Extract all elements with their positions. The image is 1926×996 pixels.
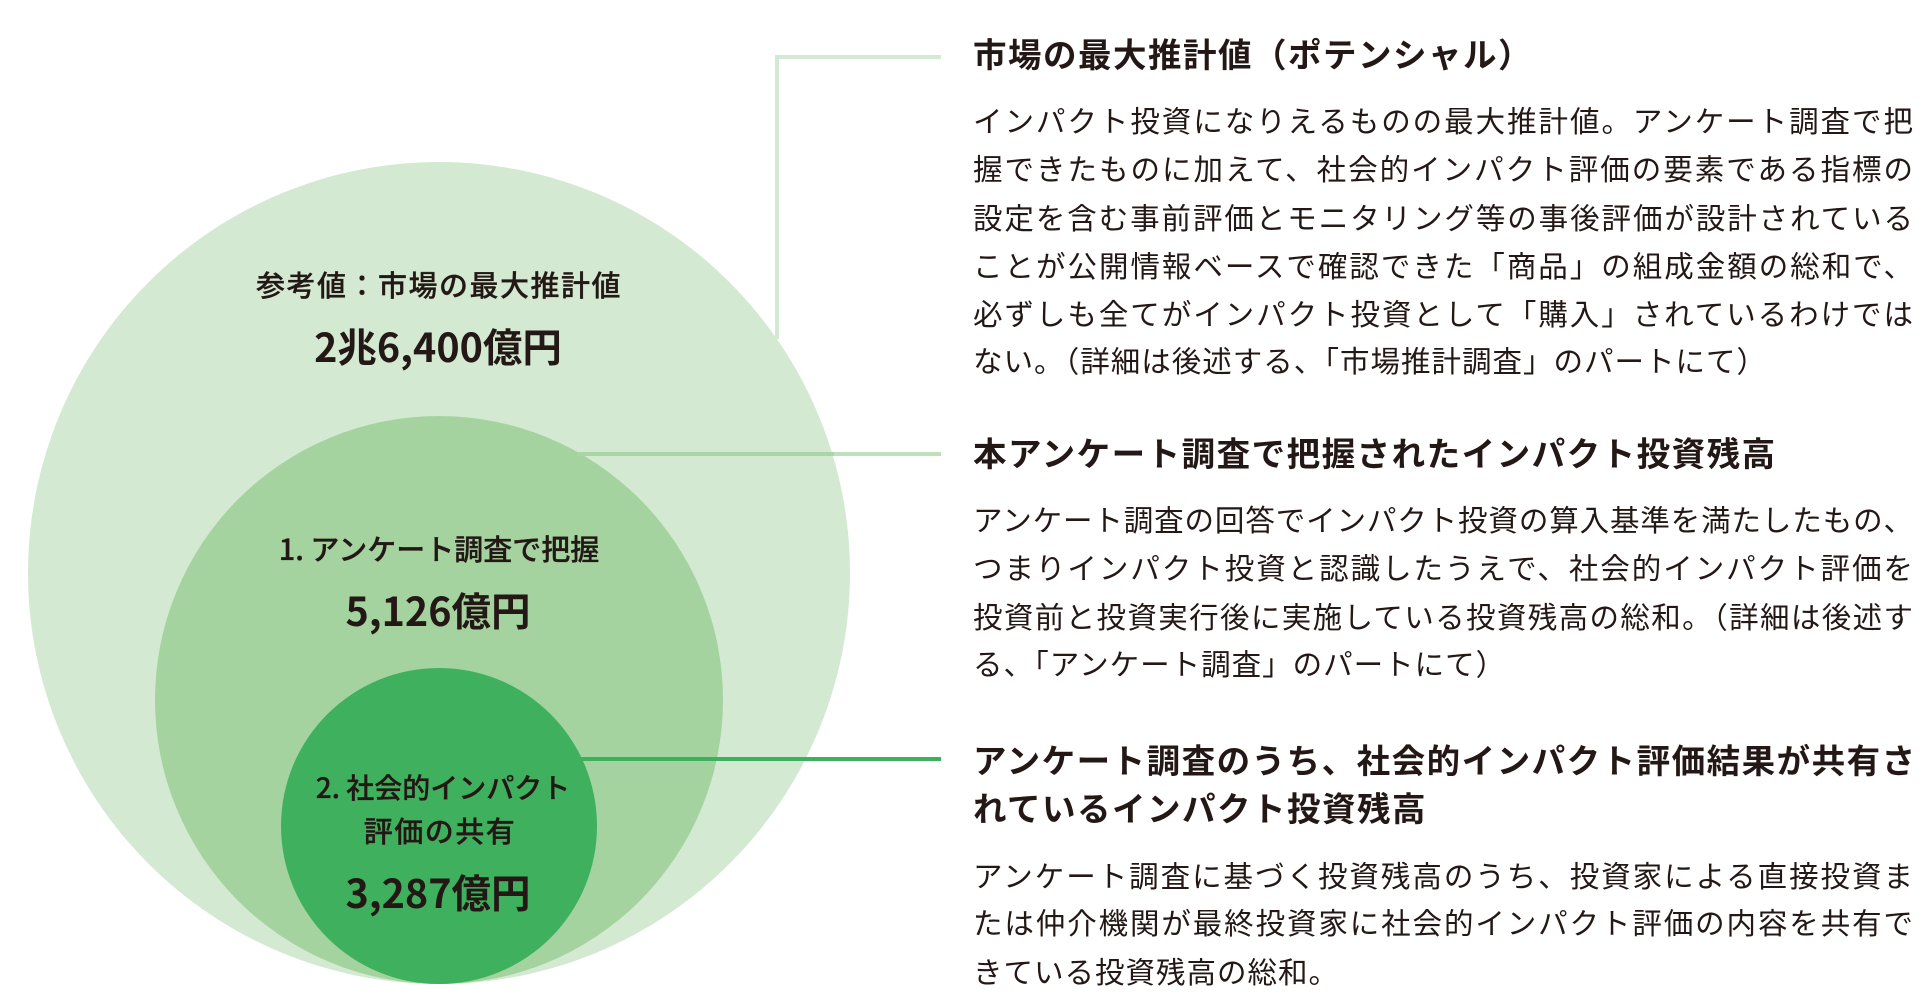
body: market potential: 設定を含む事前評価とモニタリング等の事後評価が設計されている xyxy=(973,196,1913,238)
connector: market maximum to heading xyxy=(775,55,941,339)
body: survey total: つまりインパクト投資と認識したうえで、社会的インパクト評価を xyxy=(973,546,1913,588)
body: impact evaluation shared: きている投資残高の総和。 xyxy=(973,950,1339,992)
value: 5,126億円: 5,126億円 xyxy=(345,581,531,638)
body: survey total: る、「アンケート調査」のパートにて） xyxy=(973,642,1506,684)
heading: impact evaluation shared xyxy=(973,734,1917,831)
heading: impact evaluation shared: アンケート調査のうち、社会的インパクト評価結果が共有さ xyxy=(973,734,1917,783)
body: impact evaluation shared xyxy=(973,854,1913,992)
label: impact evaluation shared: 評価の共有 xyxy=(364,809,516,851)
nested circle diagram xyxy=(28,162,850,984)
value: 2兆6,400億円: 2兆6,400億円 xyxy=(314,317,562,374)
heading: impact evaluation shared: れているインパクト投資残高 xyxy=(973,782,1427,831)
label: impact evaluation shared: 2. 社会的インパクト xyxy=(316,767,570,807)
body: market potential: ない。（詳細は後述する、「市場推計調査」のパートにて） xyxy=(973,339,1767,381)
label: market maximum estimate: 参考値：市場の最大推計値 xyxy=(256,263,622,305)
body: survey total: アンケート調査の回答でインパクト投資の算入基準を満たしたもの、 xyxy=(973,498,1913,540)
heading: market potential: 市場の最大推計値（ポテンシャル） xyxy=(973,28,1533,77)
heading: survey total: 本アンケート調査で把握されたインパクト投資残高 xyxy=(973,427,1777,476)
value: 3,287億円: 3,287億円 xyxy=(345,863,531,920)
body: survey total xyxy=(973,498,1913,684)
body: market potential xyxy=(973,99,1913,381)
body: market potential: インパクト投資になりえるものの最大推計値。アンケート調査で把 xyxy=(973,99,1913,141)
body: survey total: 投資前と投資実行後に実施している投資残高の総和。（詳細は後述す xyxy=(973,595,1913,637)
body: market potential: ことが公開情報ベースで確認できた「商品」の組成金額の総和で、 xyxy=(973,244,1913,286)
text block: market potential xyxy=(973,28,1913,381)
connector: survey total to heading xyxy=(578,452,941,456)
text block: impact evaluation shared xyxy=(973,734,1917,992)
circle: survey total xyxy=(155,416,723,984)
label: survey total: 1. アンケート調査で把握 xyxy=(279,527,599,569)
circle: market maximum estimate xyxy=(28,162,850,984)
body: market potential: 必ずしも全てがインパクト投資として「購入」されているわけでは xyxy=(973,292,1913,334)
body: impact evaluation shared: アンケート調査に基づく投資残高のうち、投資家による直接投資ま xyxy=(973,854,1913,896)
text block: survey total xyxy=(973,427,1913,684)
connector: impact evaluation to heading xyxy=(580,757,941,761)
body: impact evaluation shared: たは仲介機関が最終投資家に社会的インパクト評価の内容を共有で xyxy=(973,901,1913,943)
circle: impact evaluation shared xyxy=(281,668,597,984)
label: impact evaluation shared xyxy=(316,767,570,851)
body: market potential: 握できたものに加えて、社会的インパクト評価の要素である指標の xyxy=(973,147,1913,189)
